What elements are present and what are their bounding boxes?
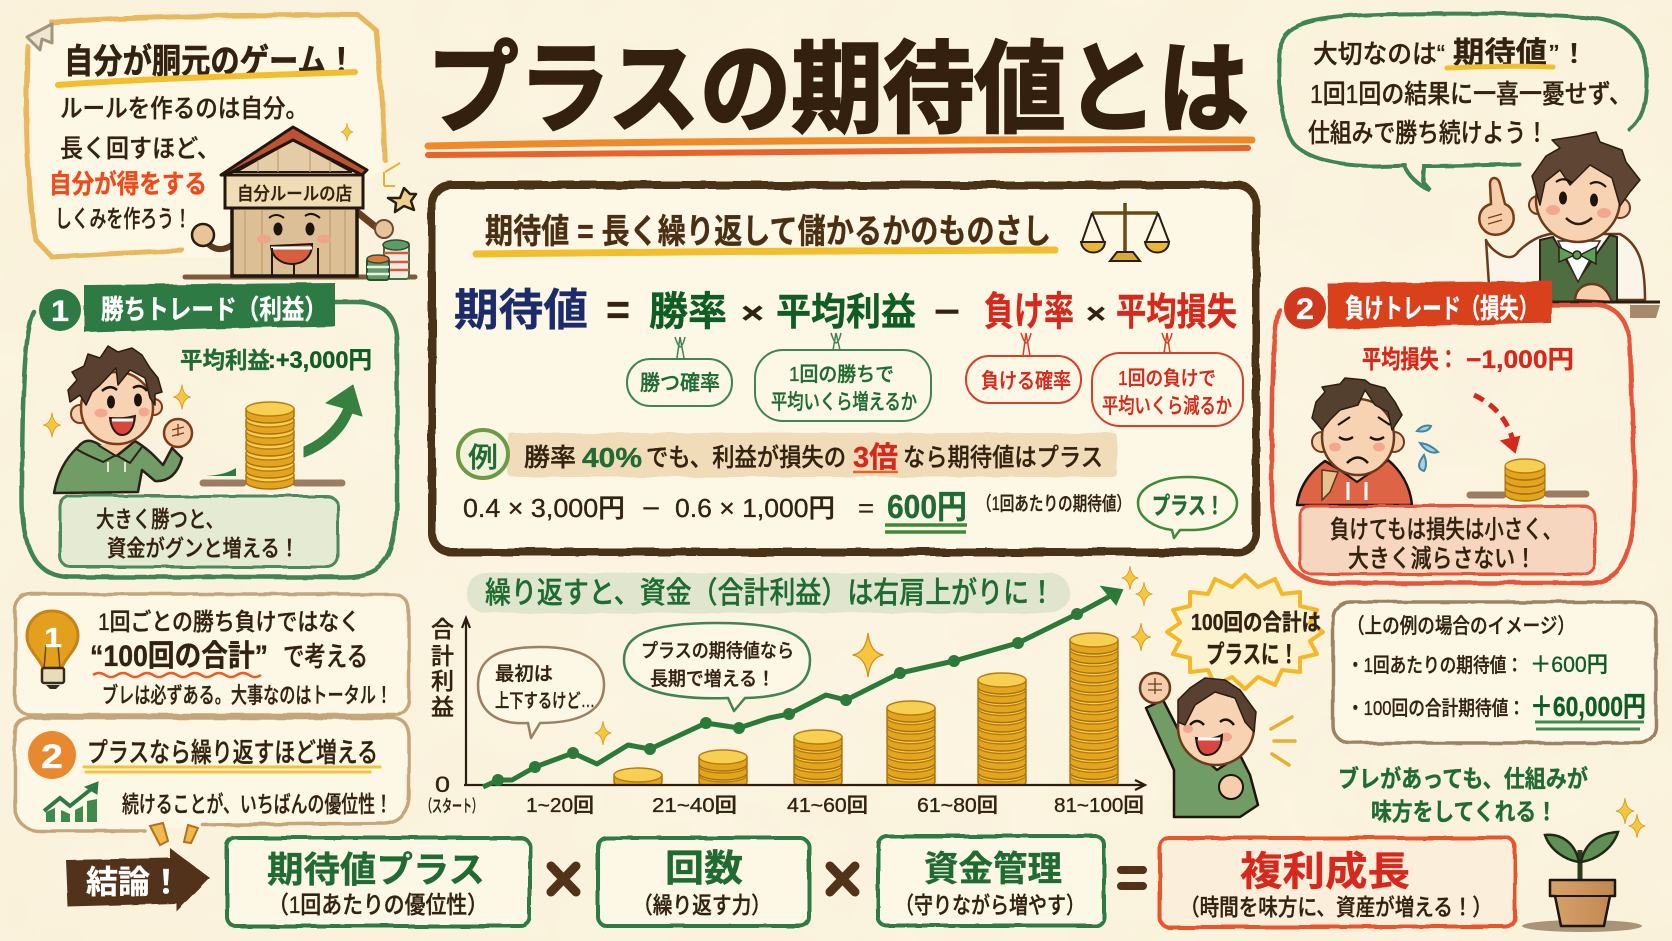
speech bubble: teacher: ”！ [1549, 39, 1589, 69]
bubble: plus [1138, 477, 1237, 538]
formula: × [741, 297, 764, 330]
example banner: 40% [582, 442, 642, 473]
box: money management: 資金管理 [924, 850, 1062, 889]
losing caption: 大きく減らさない！ [1348, 545, 1536, 573]
box: positive expectation: 期待値プラス [267, 849, 485, 890]
example banner: 3倍 [853, 441, 898, 474]
box: positive expectation [227, 838, 530, 926]
green takeaway [1338, 765, 1588, 826]
coin stacks [614, 633, 1118, 789]
bubble: average loss: 1回の負けで [1118, 367, 1216, 390]
winning caption: 大きく勝つと、 [96, 506, 224, 532]
x axis labels: 1~20回 [526, 795, 594, 817]
formula: 期待値 [454, 286, 588, 335]
y axis label: 合 [431, 616, 454, 642]
losing panel border [1272, 305, 1635, 583]
repeat heading: プラスなら繰り返すほど増える [87, 738, 378, 768]
panel: losing trade [1272, 281, 1635, 583]
multiply sign [830, 866, 855, 892]
callout: hundred total burst [1167, 575, 1323, 689]
losing caption: 負けてもは損失は小さく、 [1330, 516, 1562, 544]
hundred total value [1347, 691, 1646, 722]
conclusion arrow: 結論！ [86, 864, 182, 900]
note line 1: ルールを作るのは自分。 [60, 95, 308, 123]
panel: think in totals [15, 594, 409, 715]
bubble: long-term growth: プラスの期待値なら [641, 640, 794, 662]
totals line 1: 1回ごとの勝ち負けではなく [98, 609, 360, 636]
icon: happy boy [43, 346, 192, 493]
panel: main definition [432, 185, 1256, 552]
bubble: loss rate: 負ける確率 [981, 370, 1071, 393]
x axis labels: 21~40回 [652, 795, 737, 817]
bubble: average win: 平均いくら増えるか [771, 391, 917, 414]
panel: repeat to grow [15, 718, 409, 831]
winning header [84, 283, 335, 332]
speech bubble: teacher [1279, 14, 1647, 190]
bubble: loss rate [966, 333, 1081, 403]
formula: × [1086, 298, 1106, 329]
note heading: 自分が胴元のゲーム！ [64, 42, 356, 81]
bubble: average loss [1092, 333, 1243, 426]
axes [462, 618, 1145, 790]
icon: cheering boy [1140, 673, 1258, 817]
sparkles [595, 566, 1152, 745]
worked calculation: − [642, 493, 660, 523]
green takeaway: 味方をしてくれる！ [1371, 799, 1557, 826]
winning caption [60, 496, 338, 567]
profit line [483, 587, 1122, 787]
orange badge: 2 [41, 738, 63, 776]
callout: hundred total burst: 100回の合計は [1191, 609, 1321, 635]
formula: 平均利益 [776, 292, 916, 334]
losing badge: 2 [1296, 293, 1314, 326]
per trade value: ・1回あたりの期待値： [1347, 654, 1523, 677]
average profit label: :+3,000円 [268, 347, 372, 374]
average loss label: −1,000円 [1466, 346, 1574, 374]
losing header: 負けトレード（損失） [1345, 294, 1538, 324]
dashed arrow [1474, 395, 1519, 452]
winning badge: 1 [51, 295, 69, 328]
icon: light bulb: 1 [44, 622, 62, 653]
worked calculation: 0.6 × 1,000円 [675, 493, 835, 523]
panel: growth chart [422, 566, 1152, 817]
worked calculation [463, 488, 1131, 532]
example banner: 勝率 [524, 444, 576, 472]
green takeaway: ブレがあっても、仕組みが [1338, 765, 1588, 793]
totals line 3: ブレは必ずある。大事なのはトータル！ [102, 683, 392, 708]
note outline [26, 15, 385, 257]
average profit label [180, 347, 372, 374]
box: repetitions [598, 838, 809, 926]
note heading underline [58, 72, 355, 85]
example frame [1333, 602, 1656, 743]
panel: own game note [26, 15, 385, 258]
winning panel border [22, 302, 397, 577]
table edge [1537, 302, 1660, 318]
icon: plant [1522, 798, 1645, 932]
worked calculation: （1回あたりの期待値） [977, 493, 1131, 515]
zero label: （スタート） [422, 797, 482, 816]
wavy underline [93, 673, 261, 677]
bubble: up and down [478, 647, 604, 738]
panel: winning trade [22, 283, 397, 577]
note line 3: 自分が得をする [49, 169, 207, 199]
y axis label: 利 [431, 668, 454, 694]
formula: 負け率 [984, 290, 1074, 334]
speech bubble: teacher: 期待値 [1453, 37, 1547, 70]
speech bubble: teacher: 1回1回の結果に一喜一憂せず、 [1310, 79, 1632, 109]
example heading: （上の例の場合のイメージ） [1347, 615, 1575, 638]
bubble: plus: プラス！ [1152, 493, 1224, 520]
x axis labels: 61~80回 [917, 795, 998, 817]
icon: sad boy [1297, 378, 1438, 505]
icon: mini growth chart [44, 782, 98, 822]
double underline [1535, 722, 1644, 729]
worked calculation: = [858, 493, 874, 523]
chart heading: 繰り返すと、資金（合計利益）は右肩上がりに！ [485, 577, 1055, 610]
equals sign [1121, 870, 1143, 886]
formula: − [934, 293, 960, 331]
losing header [1327, 281, 1552, 329]
winning badge [39, 289, 81, 331]
y axis label: 益 [431, 694, 454, 720]
main panel frame [432, 185, 1256, 552]
bubble: average win: 1回の勝ちで [789, 363, 894, 386]
example banner [458, 430, 1117, 478]
formula: = [606, 286, 630, 333]
note line 2: 長く回すほど、 [60, 135, 220, 163]
average loss label: 平均損失： [1362, 346, 1458, 374]
conclusion arrow [66, 823, 210, 912]
coin stack and arrow [203, 385, 362, 489]
orange badge [28, 731, 76, 779]
x axis labels [526, 795, 1144, 817]
box: repetitions: （繰り返す力） [633, 892, 771, 918]
icon: light bulb [27, 611, 78, 689]
winning header: 勝ちトレード（利益） [101, 295, 327, 325]
pennant icon [27, 24, 52, 50]
speech bubble: teacher: 大切なのは“ [1313, 39, 1445, 69]
totals line 2: “100回の合計” [90, 640, 268, 673]
icon: shop house: 自分ルールの店 [237, 184, 352, 204]
bubble: average loss: 平均いくら減るか [1102, 395, 1232, 418]
losing badge [1283, 286, 1327, 330]
hundred total value: ・100回の合計期待値： [1347, 697, 1525, 720]
repeat subtext: 続けることが、いちばんの優位性！ [122, 791, 392, 817]
title: プラスの期待値とは [427, 34, 1249, 146]
losing caption [1300, 506, 1595, 574]
callout: hundred total burst: プラスに！ [1206, 641, 1298, 669]
multiply sign [551, 866, 576, 892]
zero label: 0 [435, 772, 450, 797]
example banner: 例 [468, 442, 498, 473]
icon: scales [1081, 203, 1169, 261]
bubble: win rate [627, 337, 732, 406]
formula [454, 286, 1237, 335]
panel: example image [1333, 602, 1656, 743]
box: positive expectation: （1回あたりの優位性） [268, 892, 488, 919]
winning caption: 資金がグンと増える！ [107, 535, 299, 561]
bubble: win rate: 勝つ確率 [640, 372, 720, 395]
bubble: long-term growth: 長期で増える！ [650, 668, 775, 690]
speech bubble: teacher: 仕組みで勝ち続けよう！ [1308, 118, 1548, 148]
average loss label [1362, 346, 1574, 374]
bubble: up and down: 最初は [495, 663, 553, 685]
formula: 平均損失 [1116, 292, 1237, 334]
box: money management: （守りながら増やす） [895, 892, 1085, 918]
worked calculation: 600円 [887, 488, 967, 525]
totals line 2: で考える [283, 642, 368, 672]
icon: shop house [185, 123, 416, 277]
per trade value: ＋600円 [1530, 652, 1608, 677]
y axis label [431, 616, 454, 720]
note line 4: しくみを作ろう！ [55, 206, 191, 233]
example banner: なら期待値はプラス [903, 444, 1103, 472]
box: compound growth [1160, 838, 1515, 927]
worked calculation: 0.4 × 3,000円 [463, 493, 625, 523]
small coin stack [1470, 459, 1586, 501]
y axis label: 計 [431, 643, 454, 669]
bubble: up and down: 上下するけど… [495, 690, 595, 712]
totals frame [15, 594, 409, 715]
box: money management [878, 836, 1104, 926]
average profit label: 平均利益 [180, 347, 270, 373]
box: compound growth: 複利成長 [1240, 850, 1410, 894]
formula: 勝率 [649, 290, 727, 334]
bubble: average win [755, 333, 931, 421]
example banner: でも、利益が損失の [646, 444, 846, 472]
x axis labels: 81~100回 [1054, 795, 1144, 817]
zero label [422, 772, 482, 816]
hundred total value: ＋60,000円 [1530, 691, 1646, 722]
x axis labels: 41~60回 [787, 795, 868, 817]
repeat frame [15, 718, 409, 831]
bubble: long-term growth [624, 623, 810, 711]
accent lines [1271, 717, 1295, 765]
icon: poker chips [367, 240, 409, 280]
box: repetitions: 回数 [665, 848, 743, 889]
yellow underline [84, 767, 380, 772]
definition heading: 期待値 = 長く繰り返して儲かるかのものさし [485, 213, 1051, 251]
icon: pointing teacher [1479, 132, 1645, 302]
box: compound growth: （時間を味方に、資産が増える！） [1180, 894, 1492, 920]
note fill [30, 17, 383, 258]
